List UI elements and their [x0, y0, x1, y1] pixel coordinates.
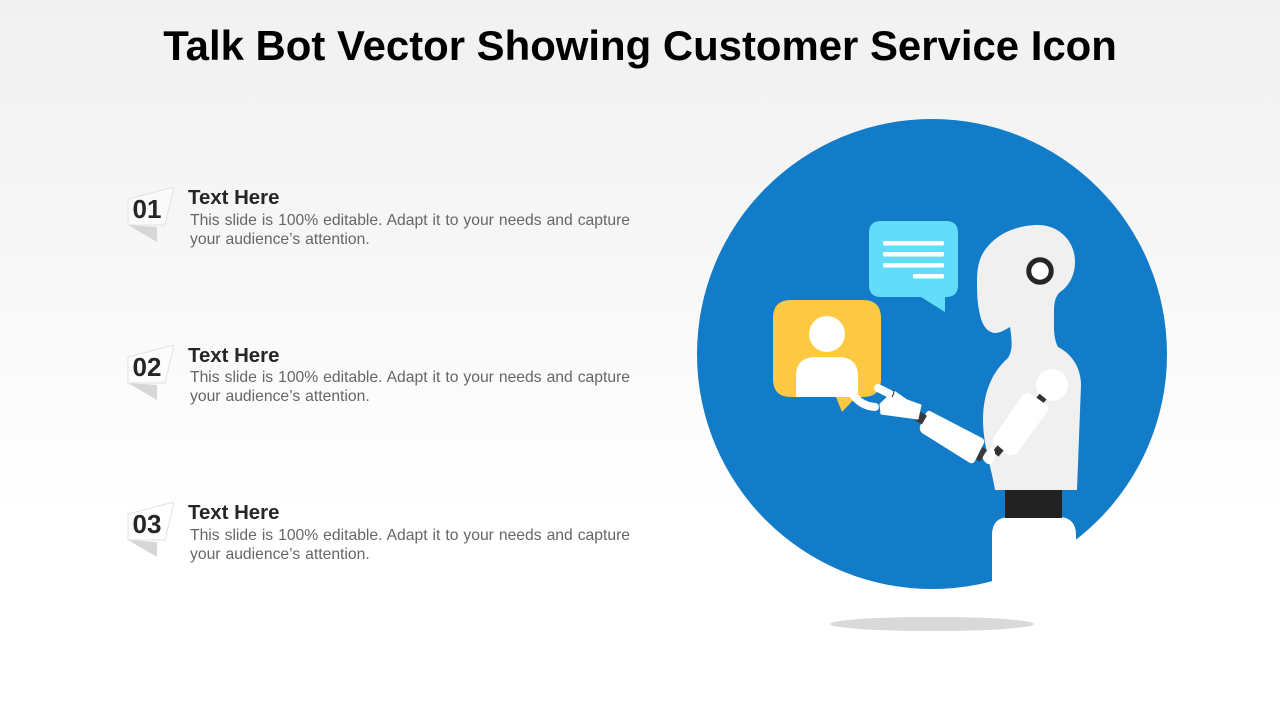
description 01: This slide is 100% editable. Adapt it to your needs and capture	[190, 212, 630, 229]
palm	[880, 391, 921, 419]
bubble body	[773, 300, 881, 412]
speech bubble: chat	[869, 221, 958, 312]
wrist joint	[915, 412, 927, 424]
finger joint	[892, 390, 894, 397]
speech bubble: user profile	[773, 300, 881, 412]
number 01: 01	[133, 194, 161, 224]
bubble body	[869, 221, 958, 312]
list item 03	[128, 502, 630, 563]
forearm	[920, 411, 984, 463]
description 03: your audience’s attention.	[190, 546, 370, 563]
badge 03	[128, 502, 174, 557]
user body	[796, 357, 858, 397]
blue circle	[697, 119, 1167, 589]
shoulder ball	[1036, 369, 1068, 401]
description 01: your audience’s attention.	[190, 231, 370, 248]
robot hand	[854, 388, 921, 419]
robot waist	[1005, 489, 1062, 518]
user head	[809, 316, 845, 352]
number 02: 02	[133, 352, 161, 382]
forearm joint	[974, 446, 987, 462]
badge 01	[128, 187, 174, 242]
thumb	[854, 396, 875, 407]
number 03: 03	[133, 508, 161, 538]
robot pedestal	[992, 517, 1076, 590]
upper arm	[993, 393, 1048, 455]
elbow cap	[983, 447, 995, 464]
robot near arm	[983, 369, 1068, 464]
list item 01	[128, 187, 630, 248]
shoulder joint	[1036, 394, 1047, 403]
robot head and torso	[977, 225, 1081, 490]
finger	[878, 388, 890, 394]
heading 02: Text Here	[188, 345, 279, 367]
description 02: This slide is 100% editable. Adapt it to your needs and capture	[190, 369, 630, 386]
heading 03: Text Here	[188, 502, 279, 524]
description 03	[190, 527, 630, 563]
robot ear ring	[1029, 260, 1051, 282]
description 01	[190, 212, 630, 248]
description 03: This slide is 100% editable. Adapt it to your needs and capture	[190, 527, 630, 544]
list item 02	[128, 345, 630, 405]
ground shadow	[830, 617, 1034, 631]
description 02	[190, 369, 630, 405]
heading 01: Text Here	[188, 187, 279, 209]
bubble text lines	[883, 241, 944, 278]
badge 02	[128, 345, 174, 400]
elbow joint	[992, 445, 1004, 457]
description 02: your audience’s attention.	[190, 388, 370, 405]
title: Talk Bot Vector Showing Customer Service Icon	[163, 22, 1117, 69]
